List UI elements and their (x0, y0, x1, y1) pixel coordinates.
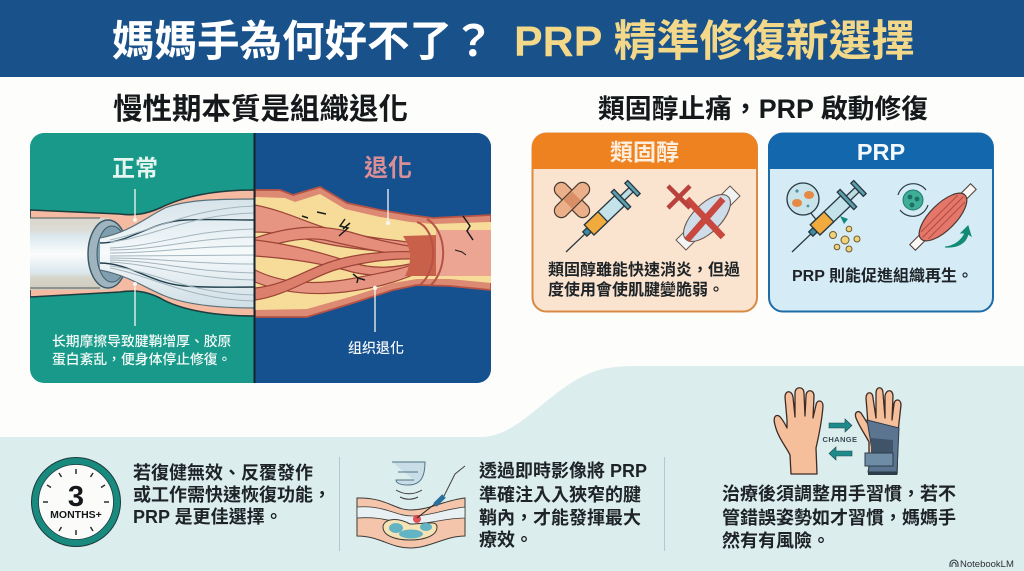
title: PRP 精準修復新選擇 (514, 18, 915, 66)
divider (664, 457, 665, 551)
label: normal: 正常 (112, 155, 158, 181)
text: when to choose PRP: PRP 是更佳選擇。 (133, 507, 283, 527)
icon: syringe (784, 178, 868, 261)
illustration: normal tendon (30, 190, 255, 316)
icon: 3 months clock: MONTHS+ (50, 509, 102, 521)
caption: normal: 蛋白紊乱，便身体停止修復。 (52, 351, 231, 367)
label: change: CHANGE (823, 435, 857, 444)
icon: 3 months clock: 3 (68, 481, 84, 513)
icon: stem cell (898, 184, 928, 216)
icon: magnifier platelets (787, 183, 819, 222)
icon: 3 months clock (32, 458, 120, 546)
panel: steroid (532, 133, 757, 312)
panel title: 類固醇 (610, 139, 679, 165)
panel: PRP (768, 133, 993, 312)
text: change hand habits: 然有有風險。 (722, 530, 830, 551)
icon: hand with wrist brace (855, 388, 901, 475)
bottom section background (0, 366, 1024, 571)
caption: normal: 长期摩擦导致腱鞘增厚、胶原 (52, 333, 232, 349)
text: change hand habits: 管錯誤姿勢如才習慣，媽媽手 (722, 507, 956, 528)
caption: degenerated: 组织退化 (348, 340, 404, 356)
text: image guided injection: 鞘內，才能發揮最大 (479, 508, 641, 528)
heading: left: 慢性期本質是組織退化 (113, 93, 408, 126)
text: 度使用會使肌腱變脆弱。 (548, 280, 724, 299)
text: PRP 則能促進組織再生。 (792, 266, 973, 285)
icon: growth arrow (945, 226, 971, 247)
icon: bare hand (774, 388, 823, 474)
panel title: PRP (857, 139, 905, 165)
text: when to choose PRP: 或工作需快速恢復功能， (133, 484, 331, 505)
icon: damaged tendon crossed out (668, 186, 740, 250)
heading: right: 類固醇止痛，PRP 啟動修復 (598, 94, 928, 124)
icon: healthy muscle (903, 177, 983, 257)
panel: tendon comparison (30, 133, 492, 383)
title (112, 18, 915, 66)
text: image guided injection: 透過即時影像將 PRP (479, 460, 647, 481)
text: 類固醇雖能快速消炎，但過 (548, 260, 740, 279)
icon: syringe (558, 178, 642, 261)
text: image guided injection: 療效。 (479, 530, 533, 550)
icon: change arrows (823, 419, 857, 460)
divider (254, 133, 256, 383)
text: image guided injection: 準確注入入狹窄的腱 (479, 484, 641, 505)
title: 媽媽手為何好不了？ (112, 19, 495, 66)
label: degenerated: 退化 (364, 155, 412, 182)
icon: bandage (551, 179, 593, 221)
icon: growth factors (830, 216, 860, 252)
pointer lines (133, 189, 390, 332)
divider (339, 457, 340, 551)
text: when to choose PRP: 若復健無效、反覆發作 (133, 462, 313, 483)
header banner (0, 0, 1024, 77)
icon: ultrasound guided injection (357, 462, 465, 548)
NotebookLM mark: NotebookLM (960, 559, 1014, 570)
text: change hand habits: 治療後須調整用手習慣，若不 (722, 484, 956, 504)
illustration: degenerated tendon (255, 187, 492, 317)
